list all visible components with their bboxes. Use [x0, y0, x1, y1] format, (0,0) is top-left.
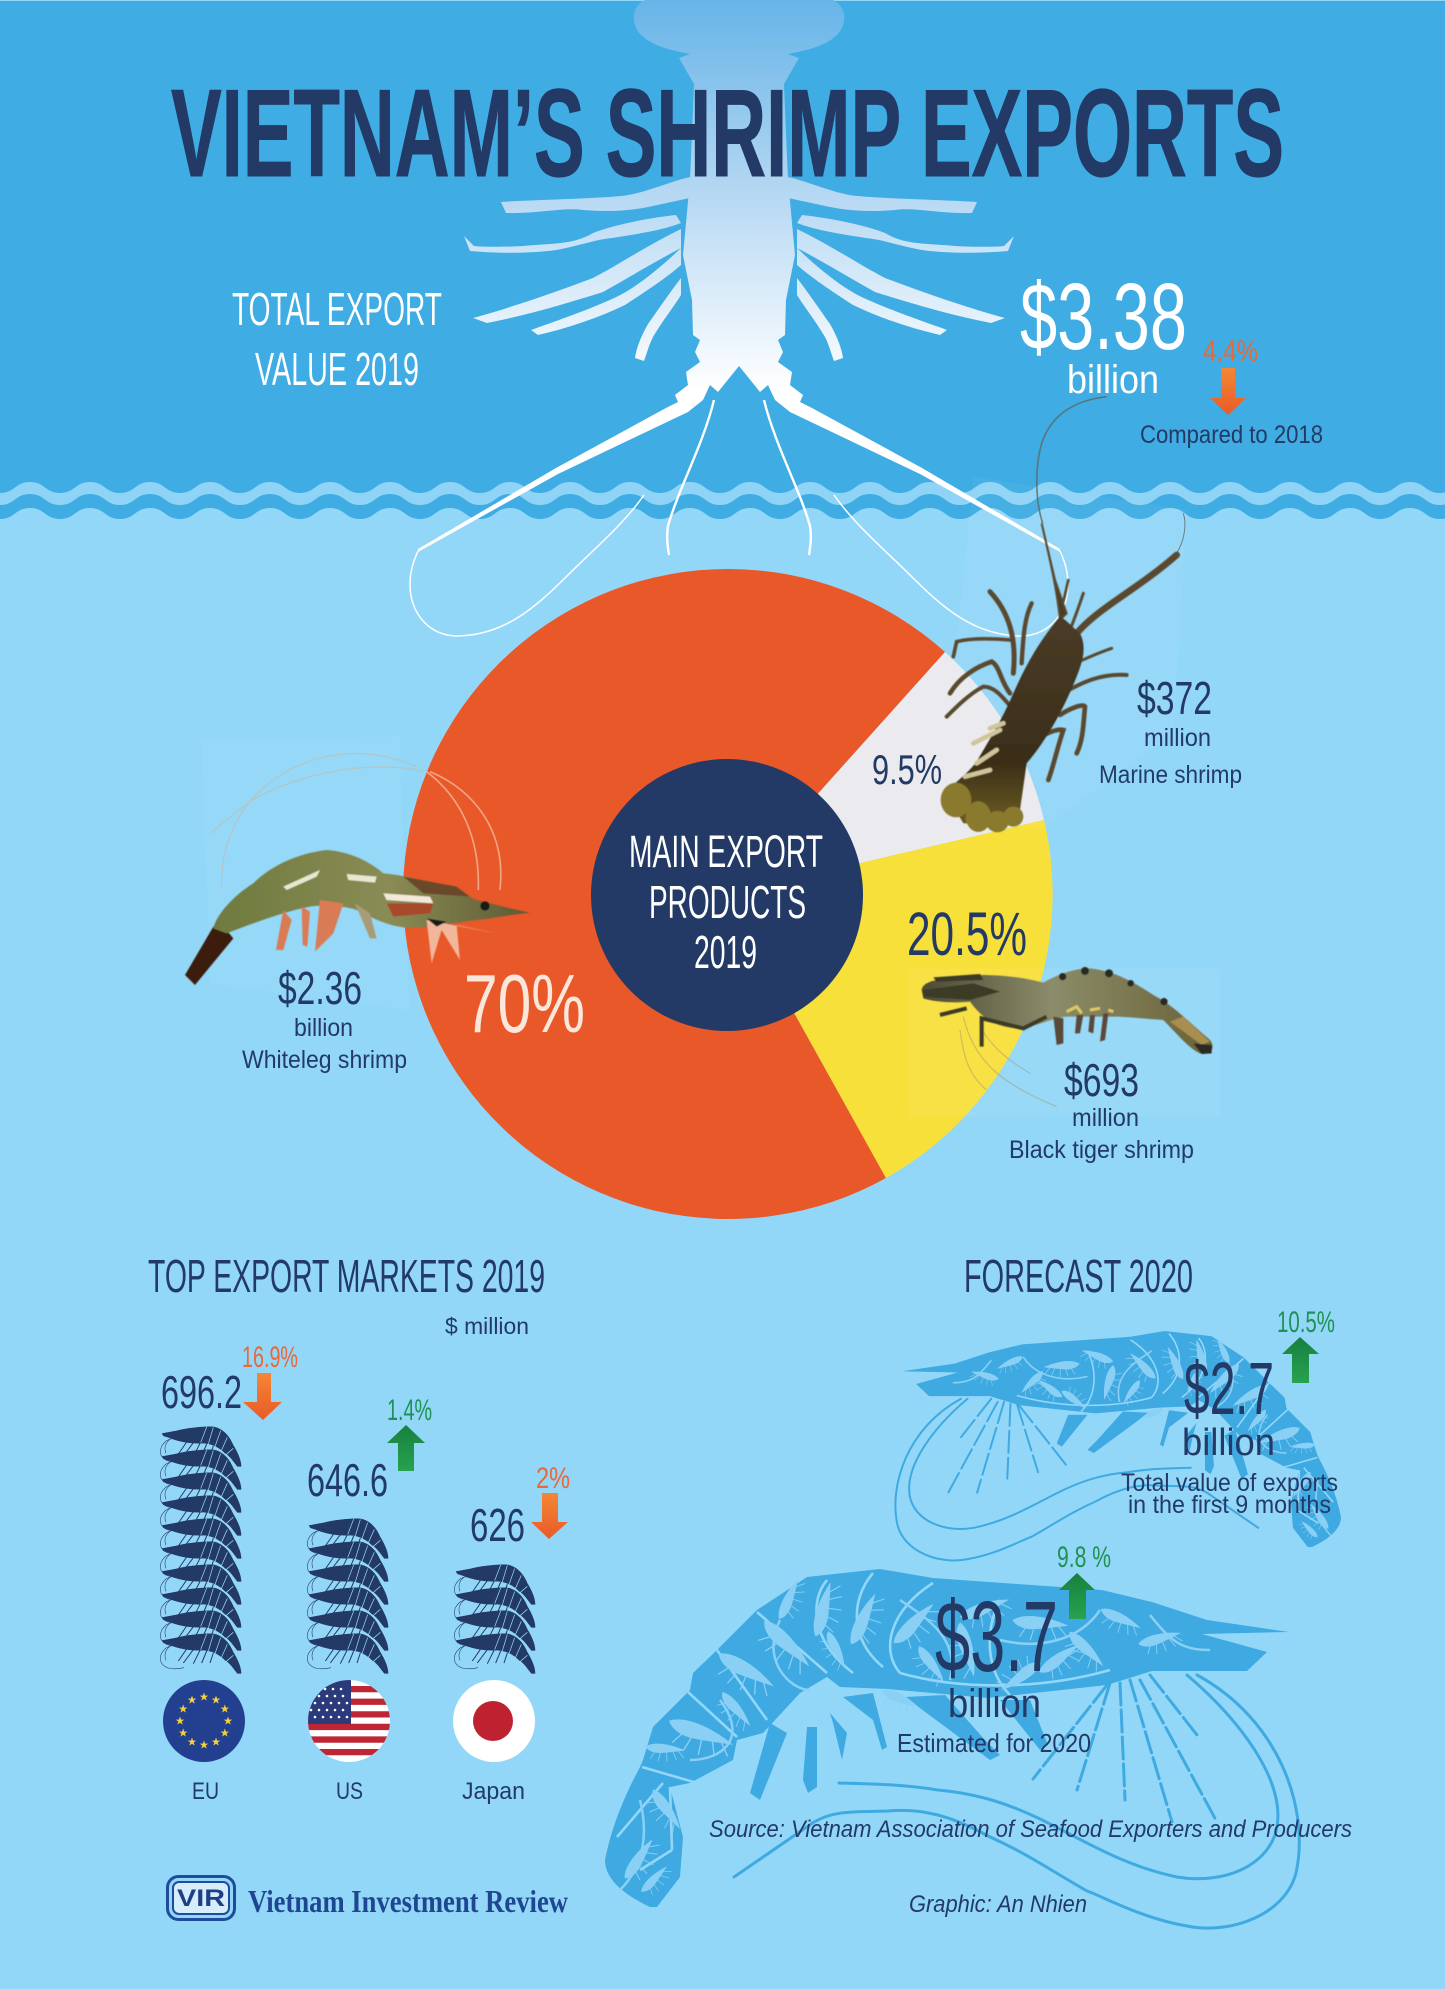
Japan label: Japan — [462, 1778, 525, 1805]
arrow up — [1059, 1573, 1095, 1619]
EU change: 16.9% — [242, 1341, 298, 1374]
change vs 2018: Compared to 2018 — [1140, 421, 1323, 449]
unit note: $ million — [445, 1313, 529, 1339]
arrow up — [1282, 1337, 1319, 1383]
photo: whiteleg shrimp — [185, 737, 530, 1010]
forecast: first nine months: billion — [1182, 1422, 1275, 1464]
heading: top export markets: TOP EXPORT MARKETS 2019 — [148, 1250, 545, 1302]
label: marine shrimp: $372 — [1137, 672, 1212, 724]
forecast: first nine months — [1121, 1306, 1338, 1519]
label: black tiger shrimp — [1009, 1054, 1194, 1164]
change vs 2018: 4.4% — [1203, 335, 1258, 368]
label: whiteleg shrimp: Whiteleg shrimp — [242, 1046, 407, 1074]
label: marine shrimp: Marine shrimp — [1099, 761, 1242, 789]
total export value — [1020, 264, 1187, 402]
caption: Estimated for 2020 — [897, 1728, 1091, 1758]
EU flag — [163, 1680, 245, 1762]
forecast: first nine months: in the first 9 months — [1128, 1491, 1331, 1519]
US shrimp stack — [307, 1519, 388, 1674]
change vs 2018 — [1140, 335, 1323, 449]
label: whiteleg shrimp: billion — [294, 1014, 353, 1042]
value: $2.7 — [1184, 1347, 1274, 1430]
EU shrimp stack — [160, 1427, 241, 1674]
Japan value: 626 — [470, 1499, 525, 1551]
total export value: billion — [1067, 358, 1159, 402]
market: Japan — [453, 1462, 570, 1805]
wave strip — [0, 470, 1445, 530]
label: marine shrimp — [1099, 672, 1242, 789]
heading: forecast: FORECAST 2020 — [964, 1250, 1193, 1302]
change: 9.8 % — [1057, 1541, 1111, 1574]
top band — [0, 1, 1445, 525]
photo: black tiger shrimp — [908, 967, 1220, 1117]
slice: black tiger 20.5% — [728, 820, 1053, 1178]
graphic credit: Graphic: An Nhien — [909, 1891, 1087, 1918]
market: EU — [160, 1341, 298, 1805]
percent 9.5: 9.5% — [872, 746, 942, 793]
label: black tiger shrimp: Black tiger shrimp — [1009, 1136, 1194, 1164]
VIR mark: VIR — [177, 1885, 225, 1912]
value: $3.7 — [935, 1581, 1058, 1693]
total export label: TOTAL EXPORT — [232, 283, 442, 335]
Japan shrimp stack — [454, 1565, 535, 1674]
shrimp illustration: full-year forecast — [605, 1569, 1299, 1928]
percent 70: 70% — [464, 957, 585, 1050]
VIR mark — [168, 1876, 234, 1920]
newspaper name: Vietnam Investment Review — [248, 1883, 568, 1919]
total export label — [232, 283, 442, 395]
label: marine shrimp: million — [1144, 724, 1211, 752]
change: 10.5% — [1277, 1306, 1335, 1339]
US value: 646.6 — [307, 1454, 388, 1506]
US change: 1.4% — [387, 1394, 432, 1427]
arrow down — [243, 1373, 282, 1420]
arrow up — [387, 1425, 425, 1471]
US label: US — [336, 1778, 363, 1805]
label: black tiger shrimp: million — [1072, 1104, 1139, 1132]
donut chart: main export products — [403, 569, 1053, 1219]
Japan change: 2% — [536, 1462, 570, 1495]
logo: Vietnam Investment Review — [168, 1876, 568, 1920]
label: whiteleg shrimp — [242, 962, 407, 1074]
market: US — [307, 1394, 432, 1805]
arrow down — [531, 1493, 568, 1539]
total export label: VALUE 2019 — [255, 343, 419, 395]
EU value: 696.2 — [161, 1366, 242, 1418]
centre label: MAIN EXPORT — [629, 826, 823, 877]
centre label: 2019 — [694, 926, 757, 978]
centre label: PRODUCTS — [649, 876, 806, 928]
EU label: EU — [192, 1778, 219, 1805]
Japan flag — [453, 1680, 535, 1762]
US flag — [308, 1680, 390, 1762]
caption: Total value of exports — [1121, 1469, 1338, 1497]
slice: whiteleg 70% — [403, 569, 945, 1219]
label: black tiger shrimp: $693 — [1064, 1054, 1139, 1106]
donut centre — [591, 759, 863, 1031]
photo: marine shrimp — [940, 397, 1187, 832]
source note: Source: Vietnam Association of Seafood Exporters and Producers — [709, 1816, 1352, 1843]
forecast: estimate for 2020: billion — [948, 1682, 1041, 1726]
shrimp silhouette hanging from the top — [410, 0, 1068, 636]
percent 20.5: 20.5% — [907, 900, 1027, 968]
forecast: estimate for 2020 — [897, 1541, 1111, 1758]
total export value: $3.38 — [1020, 264, 1187, 370]
label: whiteleg shrimp: $2.36 — [278, 962, 362, 1014]
shrimp illustration: nine-month forecast — [895, 1331, 1341, 1560]
centre label — [629, 826, 823, 978]
slice: marine 9.5% — [728, 652, 1044, 894]
